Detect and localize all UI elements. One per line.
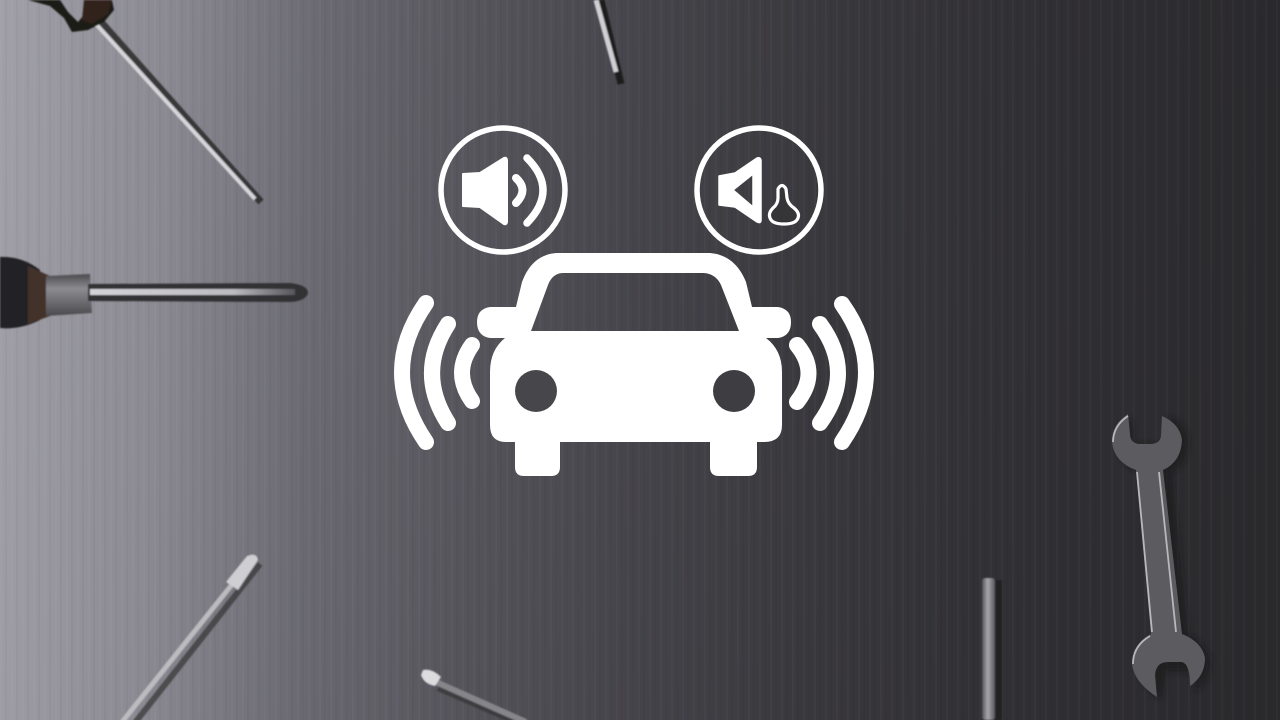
- icon: screwdriver bottom left: [122, 555, 260, 720]
- icon: car front view: [477, 253, 791, 476]
- icon: screwdriver left: [0, 257, 308, 328]
- car headlight left: [515, 370, 557, 412]
- icon: screwdriver top centre: [596, 0, 621, 84]
- icon: speaker loud in circle: [441, 128, 565, 252]
- icon: speaker with bell in circle: [697, 128, 821, 252]
- icon: screwdriver top left: [28, 0, 261, 202]
- icon: screwdriver bottom centre: [421, 670, 530, 720]
- icon: wrench: [1112, 414, 1210, 700]
- icon: sound waves right: [797, 304, 866, 442]
- icon: sound waves left: [402, 303, 472, 442]
- car headlight right: [713, 370, 755, 412]
- icon: screwdriver bottom right: [982, 578, 1002, 720]
